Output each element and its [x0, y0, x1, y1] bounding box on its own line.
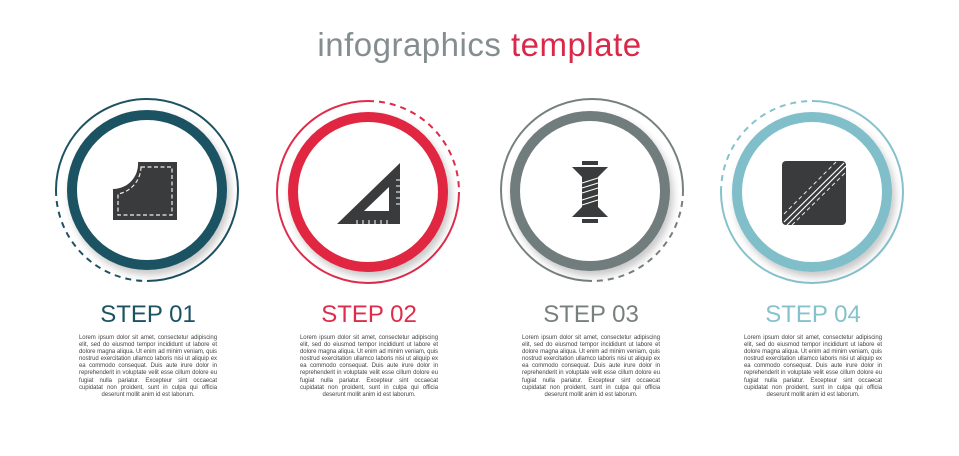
step 3 circle: [501, 99, 683, 281]
step 2 text: STEP 02: [321, 301, 417, 328]
step 1 text: STEP 01: [100, 301, 196, 328]
step 1 text: [79, 301, 218, 398]
icon: thread spool: [572, 161, 608, 223]
icon: fabric square: [782, 161, 846, 225]
step 2 text: [300, 301, 438, 398]
step 2 text: Lorem ipsum dolor sit amet, consectetur adipiscing elit, sed do eiusmod tempor incididunt ut labore et dolore magna aliqua. Ut enim ad minim veniam, quis nostrud exercitation ullamco laboris nisi ut aliquip ex ea commodo consequat. Duis aute irure dolor in reprehenderit in voluptate velit esse cillum dolore eu fugiat nulla pariatur. Excepteur sint occaecat cupidatat non proident, sunt in culpa qui officia deserunt mollit anim id est laborum.: [300, 335, 438, 398]
step 4 circle: [721, 101, 903, 283]
icon: set square: [337, 163, 400, 224]
step 2 circle: [277, 101, 459, 283]
icon: fabric piece: [113, 162, 177, 220]
step 3 text: [522, 301, 660, 398]
step 1 circle: [56, 99, 238, 281]
step 1 text: Lorem ipsum dolor sit amet, consectetur adipiscing elit, sed do eiusmod tempor incididunt ut labore et dolore magna aliqua. Ut enim ad minim veniam, quis nostrud exercitation ullamco laboris nisi ut aliquip ex ea commodo consequat. Duis aute irure dolor in reprehenderit in voluptate velit esse cillum dolore eu fugiat nulla pariatur. Excepteur sint occaecat cupidatat non proident, sunt in culpa qui officia deserunt mollit anim id est laborum.: [79, 335, 217, 398]
step 3 text: STEP 03: [543, 301, 639, 328]
title: infographics template: [317, 26, 642, 63]
step 4 text: Lorem ipsum dolor sit amet, consectetur adipiscing elit, sed do eiusmod tempor incididunt ut labore et dolore magna aliqua. Ut enim ad minim veniam, quis nostrud exercitation ullamco laboris nisi ut aliquip ex ea commodo consequat. Duis aute irure dolor in reprehenderit in voluptate velit esse cillum dolore eu fugiat nulla pariatur. Excepteur sint occaecat cupidatat non proident, sunt in culpa qui officia deserunt mollit anim id est laborum.: [744, 335, 882, 398]
step 4 text: [744, 301, 882, 398]
step 4 text: STEP 04: [765, 301, 861, 328]
graphics: [55, 98, 904, 284]
step 3 text: Lorem ipsum dolor sit amet, consectetur adipiscing elit, sed do eiusmod tempor incididunt ut labore et dolore magna aliqua. Ut enim ad minim veniam, quis nostrud exercitation ullamco laboris nisi ut aliquip ex ea commodo consequat. Duis aute irure dolor in reprehenderit in voluptate velit esse cillum dolore eu fugiat nulla pariatur. Excepteur sint occaecat cupidatat non proident, sunt in culpa qui officia deserunt mollit anim id est laborum.: [522, 335, 660, 398]
